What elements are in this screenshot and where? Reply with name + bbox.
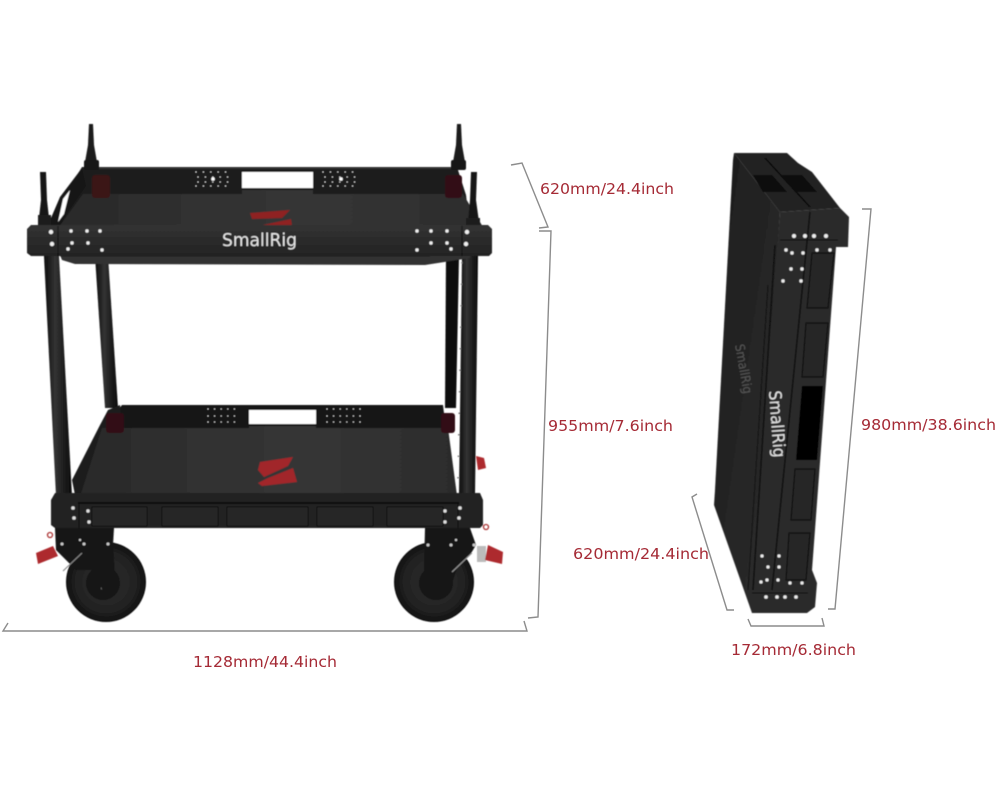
- handle cut-out: [249, 410, 316, 424]
- dimension label: upper depth: 620mm/24.4inch: [540, 180, 674, 198]
- dimension label: folded depth: 620mm/24.4inch: [573, 545, 709, 563]
- red corner latches: [92, 175, 110, 198]
- logo: SmallRig vertical: SmallRig: [764, 390, 789, 458]
- product: assembled two-shelf cart: [27, 124, 503, 622]
- rear wall hole grids: [208, 409, 360, 422]
- upper shelf tray: [48, 167, 483, 228]
- folded cart side face: [714, 153, 780, 613]
- left caster wheel: [36, 528, 146, 622]
- lower shelf tray: [72, 405, 458, 503]
- logo: faint side imprint: SmallRig: [731, 343, 755, 395]
- handle cut-out: [242, 172, 313, 188]
- dimension label: width: 1128mm/44.4inch: [193, 653, 337, 671]
- folded cart front face: [731, 208, 849, 613]
- red logo on upper shelf: [250, 210, 292, 226]
- right caster wheel: [394, 456, 503, 622]
- left brake pedal: [36, 546, 58, 564]
- dimension label: folded thickness: 172mm/6.8inch: [731, 641, 856, 659]
- folded cart top face: [734, 153, 840, 212]
- upper poles: [38, 124, 480, 228]
- logo: SmallRig: SmallRig: [222, 230, 297, 251]
- lower front beam: [51, 493, 483, 528]
- upper front beam: [27, 225, 492, 265]
- rear wall hole grids: [196, 172, 360, 186]
- dimension brackets: [3, 163, 871, 631]
- dimension label: height: 955mm/7.6inch: [548, 417, 673, 435]
- right brake pedal: [485, 545, 503, 564]
- red logo on lower shelf: [258, 457, 297, 486]
- rear and front posts: [44, 256, 478, 496]
- dimension label: folded height: 980mm/38.6inch: [861, 416, 996, 434]
- product: folded cart: [714, 153, 849, 613]
